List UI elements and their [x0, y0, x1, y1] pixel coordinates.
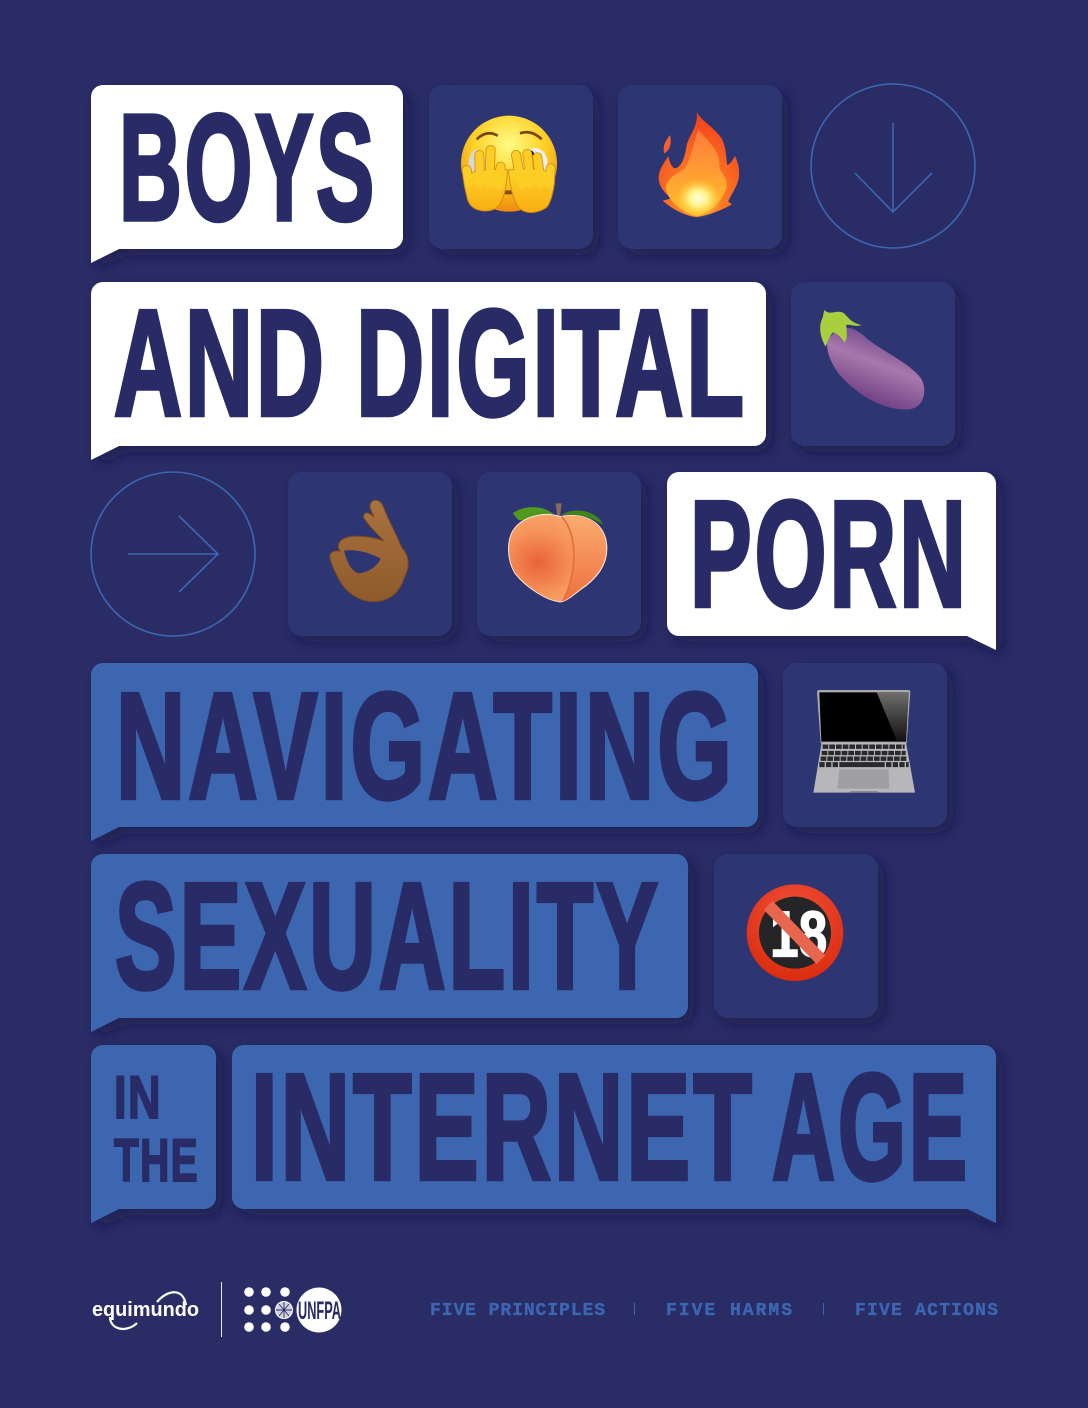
title bubble: BOYS: BOYS [119, 82, 377, 252]
subtitle bubble: SEXUALITY: SEXUALITY [115, 851, 661, 1020]
footer label: five harms: FIVE HARMS [666, 1301, 792, 1321]
logo: equimundo [92, 1292, 199, 1329]
logo: equimundo: equimundo [92, 1299, 199, 1321]
subtitle bubble: SEXUALITY [91, 851, 688, 1032]
icon tile: eggplant [791, 282, 955, 446]
icon tile: OK hand [288, 472, 452, 636]
logo: UNFPA [244, 1287, 342, 1332]
subtitle bubble: INTERNET AGE: INTERNET [251, 1042, 755, 1211]
title bubble: BOYS [91, 82, 403, 263]
circle icon: right arrow [91, 472, 255, 636]
subtitle bubble: NAVIGATING [91, 661, 758, 841]
icon tile: no under 18 [714, 854, 878, 1018]
icon tile: laptop [783, 663, 947, 827]
footer label: five principles: FIVE PRINCIPLES [430, 1301, 605, 1321]
logo: UNFPA: UNFPA [298, 1297, 341, 1325]
icon tile: face with hands over eyes [429, 85, 593, 249]
subtitle bubble: NAVIGATING: NAVIGATING [116, 661, 735, 830]
icon tile: fire [618, 85, 782, 249]
icon tile: no under 18: 18 [770, 898, 827, 971]
subtitle bubble: IN THE [91, 1045, 216, 1223]
title bubble: AND DIGITAL [91, 278, 766, 460]
icon tile: peach [477, 472, 641, 636]
footer label: five actions: FIVE ACTIONS [855, 1301, 998, 1321]
circle icon: down arrow [811, 84, 975, 248]
subtitle bubble: IN THE: THE [114, 1127, 199, 1194]
title bubble: PORN [667, 469, 996, 650]
subtitle bubble: IN THE: IN [114, 1064, 162, 1131]
logo divider [221, 1282, 222, 1337]
